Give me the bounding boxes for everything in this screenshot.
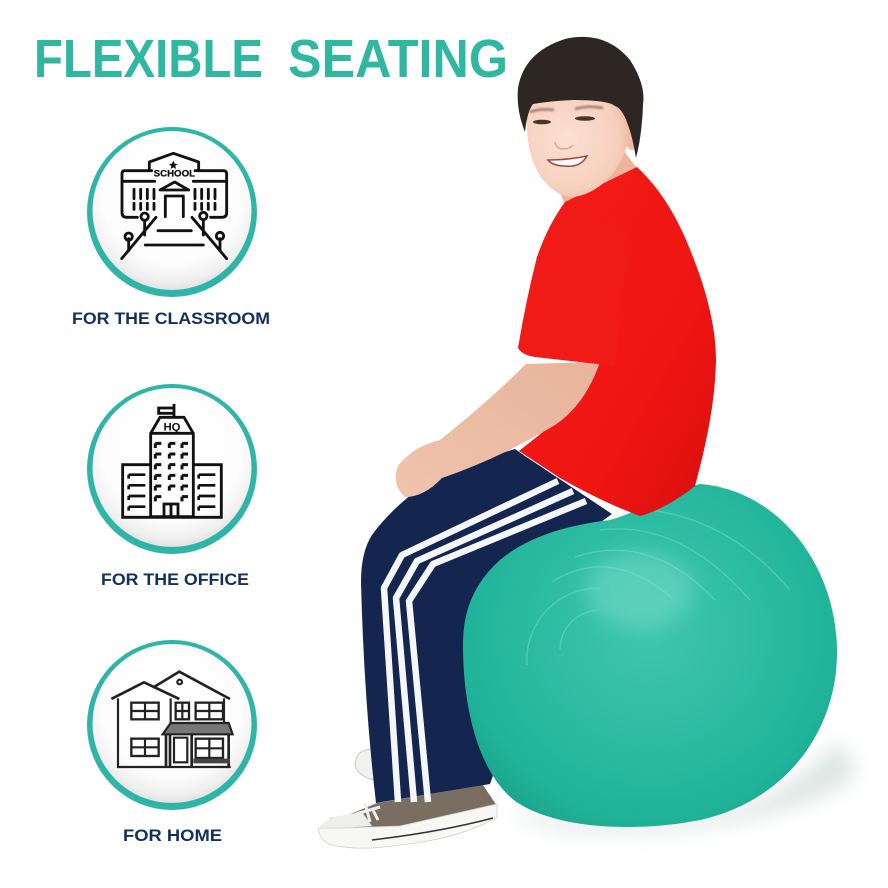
- neck: [560, 150, 637, 215]
- icon: house: [111, 672, 233, 767]
- ball shadow: [510, 745, 853, 832]
- badge: for home: [87, 640, 257, 810]
- ball ridges: [527, 510, 790, 665]
- upper body: [396, 37, 716, 516]
- title word: seating: SEATING: [288, 29, 508, 89]
- smile: [548, 156, 587, 166]
- badge disc: [92, 131, 252, 290]
- badge: for the classroom: [87, 127, 257, 297]
- title word: flexible: FLEXIBLE: [34, 29, 263, 89]
- front shoe: [318, 785, 497, 848]
- sole stripe: [372, 818, 493, 840]
- trousers: [361, 449, 612, 803]
- label: for the classroom: FOR THE CLASSROOM: [72, 309, 270, 328]
- badge ring: [87, 127, 257, 297]
- title: [34, 29, 508, 89]
- legs: [318, 449, 612, 848]
- nose: [555, 142, 573, 149]
- shoe laces: [356, 803, 380, 822]
- trouser stripes: [384, 481, 586, 802]
- left eye: [533, 120, 551, 124]
- eyes: [533, 116, 595, 124]
- face: [527, 92, 630, 197]
- exercise ball: [463, 484, 837, 827]
- shoe toe: [320, 812, 372, 828]
- ear: [624, 116, 640, 150]
- hair: [518, 37, 643, 158]
- icon: school: [122, 153, 227, 259]
- icon: office building: HQ: [163, 421, 181, 433]
- badge disc: [92, 388, 252, 547]
- badge ring: [87, 384, 257, 554]
- label: for the office: FOR THE OFFICE: [101, 570, 249, 589]
- eyebrows: [530, 107, 603, 112]
- icon: office building: [123, 404, 221, 517]
- red t-shirt body: [519, 167, 716, 516]
- badge: for the office: [87, 384, 257, 554]
- shoe sole: [318, 804, 497, 848]
- arm and hand: [396, 362, 600, 497]
- ball body: [463, 484, 837, 827]
- icon: school: SCHOOL: [154, 168, 196, 178]
- badge ring: [87, 640, 257, 810]
- right eye: [575, 116, 595, 121]
- back shoe: [355, 747, 380, 781]
- badge disc: [92, 644, 252, 803]
- label: for home: FOR HOME: [123, 826, 222, 845]
- shoe upper: [330, 785, 497, 828]
- ball highlight: [585, 552, 695, 628]
- sleeve: [518, 202, 630, 366]
